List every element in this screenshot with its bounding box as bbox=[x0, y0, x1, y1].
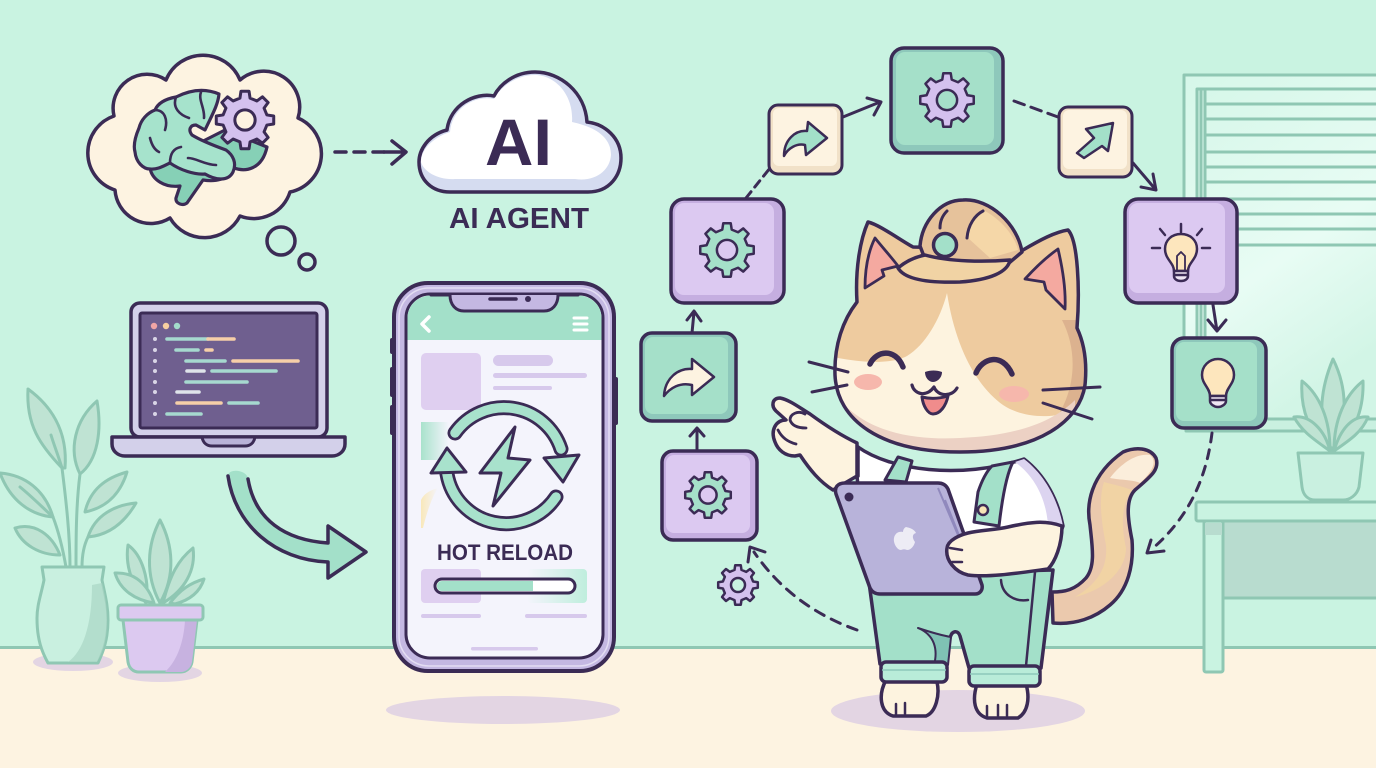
curved arrow: laptop to phone bbox=[228, 471, 366, 578]
pointing arm bbox=[773, 398, 857, 490]
dashed arrow to cream box bbox=[746, 168, 770, 198]
side buttons bbox=[390, 338, 618, 435]
overall straps bbox=[885, 457, 1013, 526]
cheeks bbox=[854, 374, 1029, 402]
box: cream diagonal arrow bbox=[1059, 107, 1132, 177]
app content cards bbox=[421, 353, 587, 650]
dashed curved arrow to small gear bbox=[754, 552, 857, 630]
gear icon bbox=[216, 91, 274, 149]
thought bubbles bbox=[267, 227, 315, 270]
box: lilac gear upper bbox=[671, 199, 784, 303]
box: lilac lightbulb with rays bbox=[1125, 199, 1237, 303]
dashed curved arrow from bulb to cat bbox=[1152, 433, 1212, 549]
side table bbox=[1196, 502, 1376, 672]
ear inner left bbox=[865, 238, 898, 288]
arrow to lilac bulb box bbox=[1133, 163, 1156, 190]
workflow loop bbox=[641, 48, 1266, 630]
head bbox=[833, 220, 1088, 454]
phone screen bbox=[406, 294, 603, 658]
floor bbox=[0, 646, 1376, 768]
small loose gear bbox=[718, 565, 758, 605]
overalls bbox=[868, 570, 1053, 686]
small potted plant bbox=[115, 520, 204, 682]
box: cream curved arrow bbox=[769, 105, 842, 174]
phone shadow bbox=[386, 696, 620, 724]
whiskers bbox=[809, 362, 1100, 419]
dashed arrow to right cream box bbox=[1014, 101, 1058, 117]
window with blinds bbox=[1184, 75, 1376, 431]
thought cloud with brain and gear bbox=[88, 55, 321, 270]
AI AGENT label: AI AGENT bbox=[449, 203, 589, 235]
finger curl bbox=[778, 412, 806, 444]
ear inner right bbox=[1025, 249, 1065, 309]
feet bbox=[881, 680, 1028, 718]
plant on table bbox=[1294, 359, 1368, 500]
cat mascot bbox=[773, 200, 1157, 718]
tablet bbox=[835, 482, 983, 597]
arrow to top gear box bbox=[843, 98, 881, 117]
laptop base bbox=[112, 437, 345, 456]
arrow: gear box to arrow box bbox=[690, 428, 704, 450]
hard hat bbox=[898, 200, 1022, 282]
code screen bbox=[140, 313, 317, 428]
AI logo text: AI bbox=[485, 105, 552, 179]
box: lilac gear lower bbox=[662, 451, 757, 540]
phone with hot reload screen bbox=[390, 283, 618, 671]
phone body bbox=[394, 283, 614, 671]
laptop lid bbox=[131, 303, 327, 437]
dashed arrow: brain to cloud bbox=[335, 141, 406, 164]
apple-like logo bbox=[894, 527, 916, 550]
arrowhead of dashed curve bbox=[1147, 540, 1164, 553]
brain icon bbox=[134, 90, 267, 204]
progress bar bbox=[435, 579, 575, 593]
large potted plant bbox=[0, 389, 136, 671]
app header bbox=[408, 296, 602, 340]
box: mint arrow bbox=[641, 333, 736, 421]
tail bbox=[1052, 449, 1157, 623]
arrow to green bulb box bbox=[1208, 305, 1226, 331]
box: top mint gear bbox=[891, 48, 1003, 153]
HOT RELOAD label: HOT RELOAD bbox=[437, 540, 573, 565]
thought cloud outline bbox=[88, 55, 321, 238]
AI cloud icon bbox=[419, 72, 621, 192]
holding arm bbox=[947, 522, 1062, 576]
t-shirt bbox=[857, 447, 1063, 569]
cat shadow bbox=[831, 690, 1085, 732]
arrow: arrow box to gear box bbox=[687, 311, 701, 333]
reload icon bbox=[431, 408, 579, 524]
laptop with code bbox=[112, 303, 345, 456]
box: mint lightbulb bbox=[1172, 338, 1266, 428]
smiling eyes bbox=[870, 353, 1012, 374]
arrowhead to small gear bbox=[748, 547, 765, 562]
nose and mouth bbox=[912, 370, 957, 414]
